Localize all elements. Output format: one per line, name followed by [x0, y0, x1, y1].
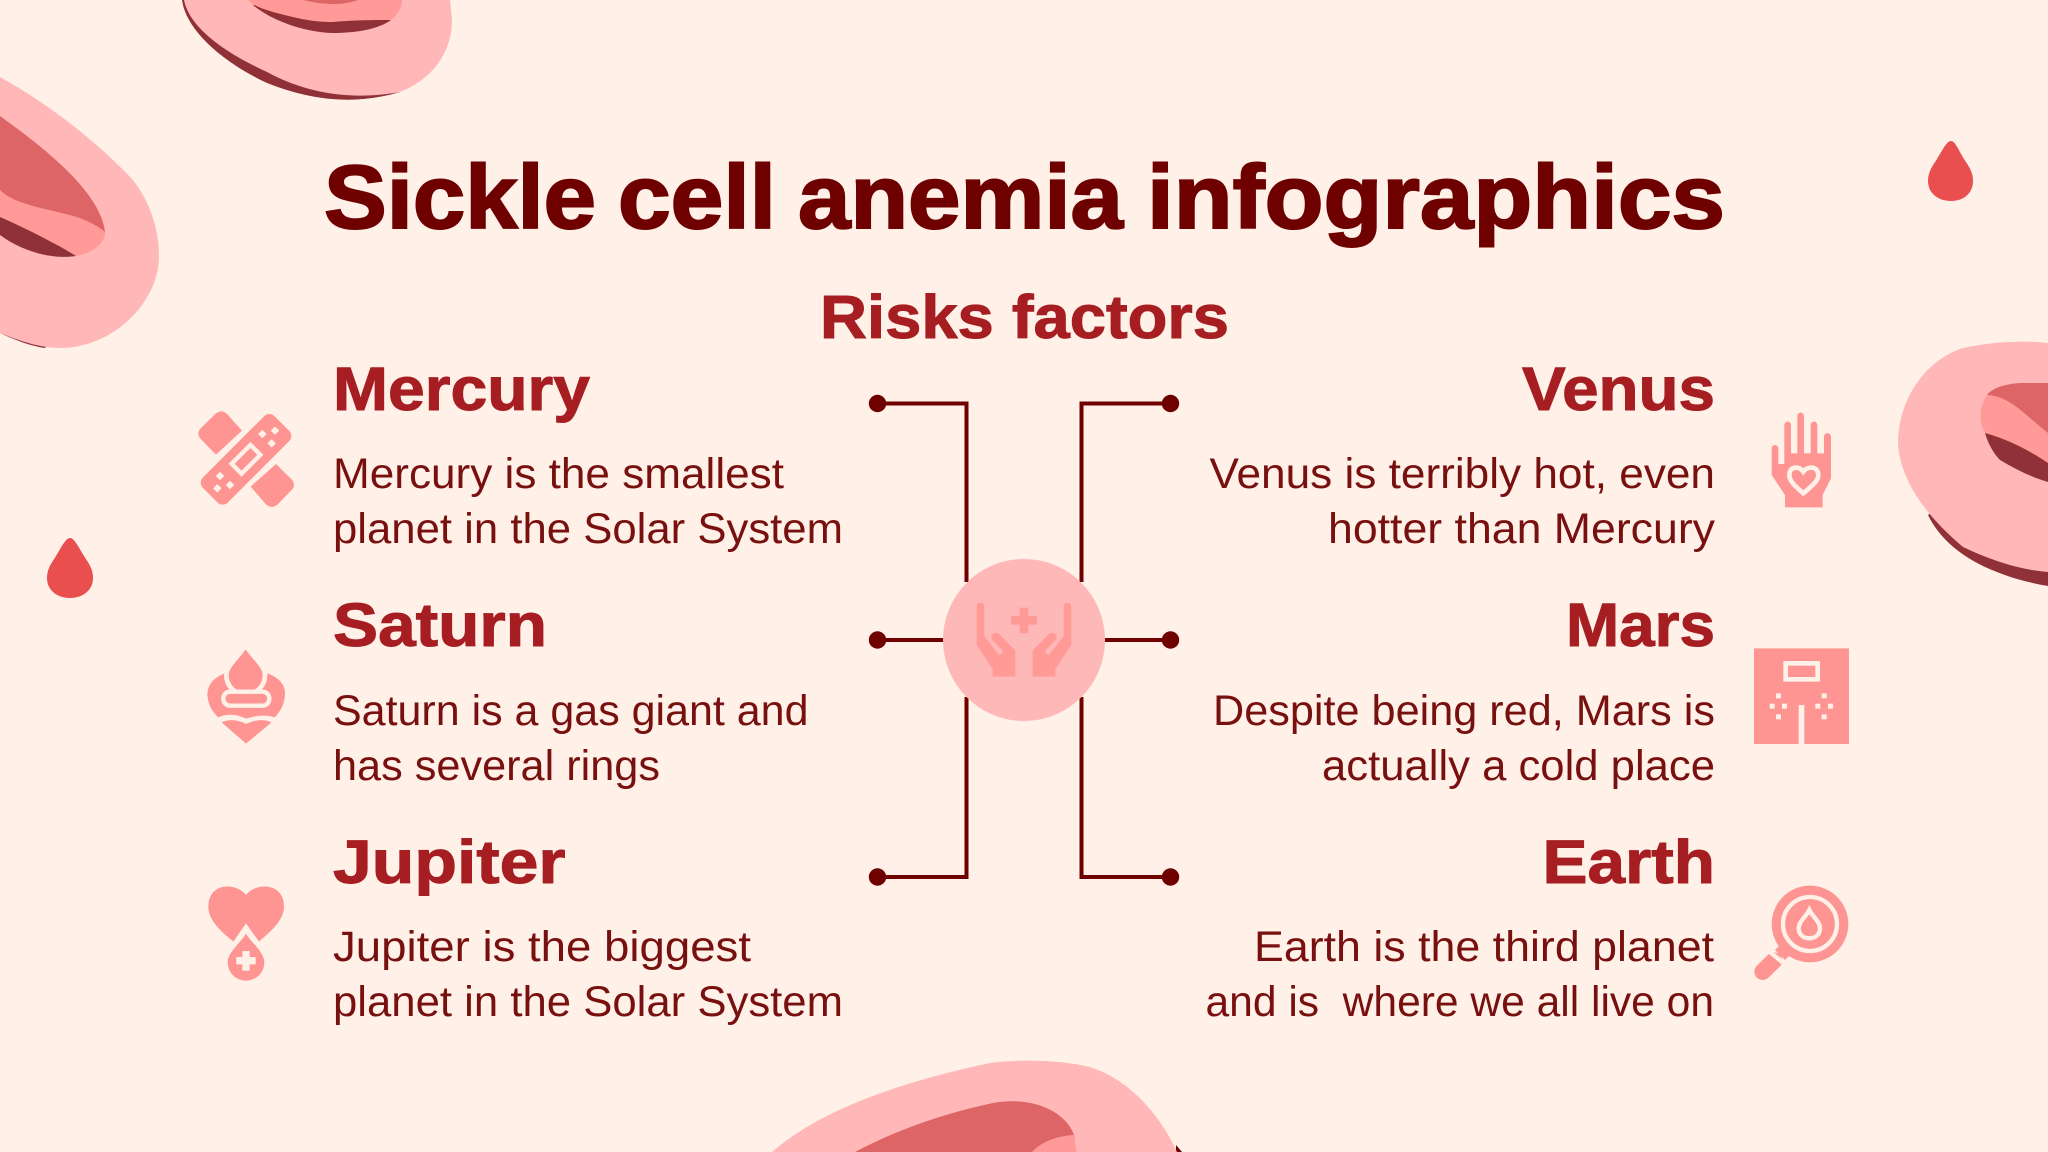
decorative blood cell: right — [1898, 342, 2048, 586]
central connector diagram — [869, 395, 1179, 886]
text: Saturn description: Saturn is a gas giant and — [333, 687, 808, 735]
heading: Saturn: Saturn — [333, 591, 547, 659]
panel: Saturn — [207, 591, 808, 790]
title: infographics — [1147, 148, 1725, 248]
decorative blood cell: top — [182, 0, 452, 100]
panel: Venus — [1210, 355, 1831, 553]
decorative blood cell: bottom — [772, 1061, 1182, 1152]
heading: Mercury: Mercury — [333, 355, 590, 423]
text: Jupiter description: planet in the Solar System — [333, 978, 843, 1026]
subtitle: Risks factors — [820, 283, 1229, 351]
text: Mercury description: Mercury is the smallest — [333, 450, 784, 498]
icon: blood drop right — [1928, 141, 1973, 201]
icon: hand with heart — [1772, 413, 1831, 507]
text: Earth description — [1206, 923, 1714, 1026]
text: Venus description: hotter than Mercury — [1328, 505, 1716, 553]
text: Venus description: Venus is terribly hot, even — [1210, 450, 1715, 498]
icon: blood drop left — [47, 538, 93, 598]
title: anemia — [798, 148, 1124, 248]
text: Earth description: Earth is the third planet — [1254, 923, 1714, 971]
panel: Earth — [1206, 828, 1848, 1026]
text: Mercury description: planet in the Solar System — [333, 505, 843, 553]
icon: drop on wave shield — [207, 645, 285, 744]
icon: lungs chart — [1754, 648, 1849, 744]
text: Mars description — [1213, 687, 1715, 790]
text: Mercury description — [333, 450, 843, 553]
text: Venus description — [1210, 450, 1716, 553]
decorative blood cell: left — [0, 77, 159, 348]
icon: caring hands with cross — [977, 603, 1071, 677]
heading: Mars: Mars — [1566, 591, 1715, 659]
icon: magnifier with drop — [1763, 886, 1848, 972]
panel: Jupiter — [208, 828, 843, 1026]
text: Saturn description: has several rings — [333, 742, 660, 790]
text: Earth description: and is where we all live on — [1206, 978, 1714, 1026]
heading: Earth: Earth — [1542, 828, 1715, 896]
text: Jupiter description: Jupiter is the biggest — [333, 923, 751, 971]
panel: Mars — [1213, 591, 1849, 790]
text: Mars description: Despite being red, Mars is — [1213, 687, 1715, 735]
heading: Jupiter: Jupiter — [333, 828, 566, 896]
title: cell — [618, 148, 776, 248]
text: Mars description: actually a cold place — [1322, 742, 1715, 790]
text: Jupiter description — [333, 923, 843, 1026]
title: Sickle — [324, 148, 596, 248]
center circle — [943, 559, 1105, 721]
text: Saturn description — [333, 687, 808, 790]
panel: Mercury — [198, 355, 843, 553]
icon: heart and drop — [208, 887, 284, 981]
icon: bandage — [198, 411, 294, 508]
heading: Venus: Venus — [1522, 355, 1715, 423]
